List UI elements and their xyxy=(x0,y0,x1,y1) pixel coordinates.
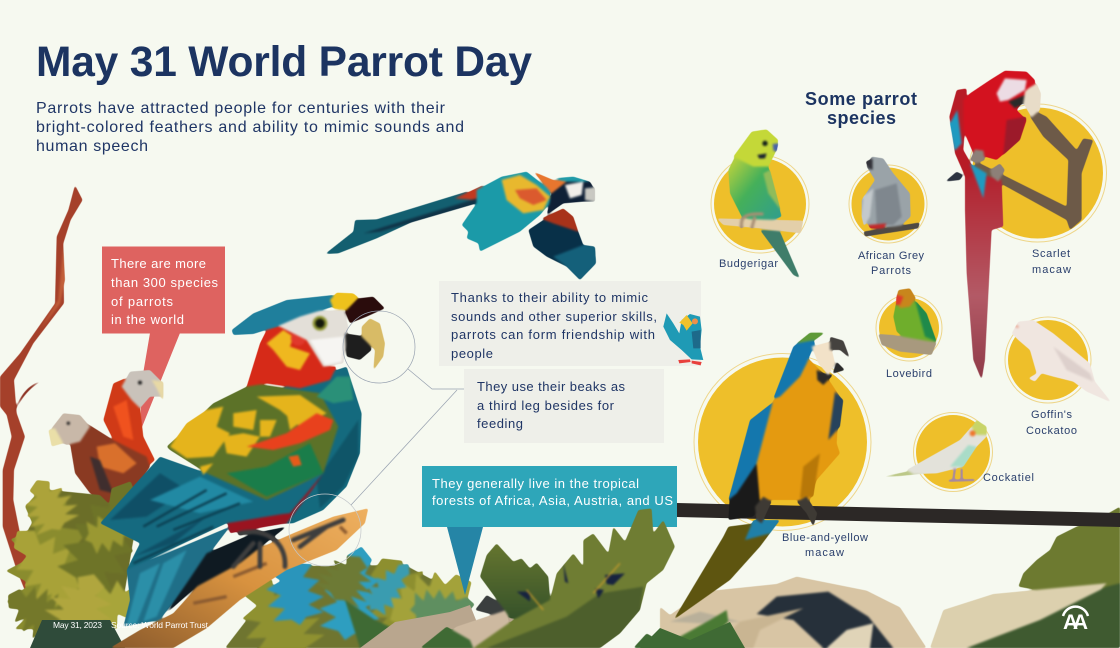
heading: some parrot species xyxy=(805,89,917,128)
wing xyxy=(728,463,760,520)
upper beak xyxy=(362,318,385,371)
body xyxy=(963,71,1035,160)
intro text: bright-colored feathers and ability to mimic sounds and xyxy=(36,119,464,136)
callout: species count: of parrots xyxy=(111,294,174,309)
callout: species count tail xyxy=(140,333,180,432)
species: goffin's cockatoo: Goffin's xyxy=(1031,409,1072,421)
beige bottom centre xyxy=(360,605,515,648)
callout: mimic friendship: people xyxy=(451,346,493,361)
face xyxy=(997,78,1027,102)
parrot: red back xyxy=(103,370,163,473)
icon: cartoon parrot xyxy=(663,313,703,365)
species: blue-and-yellow macaw: Blue-and-yellow xyxy=(782,532,868,544)
parrot: brown back xyxy=(48,413,150,510)
heading: some parrot species: species xyxy=(827,108,896,128)
left foliage xyxy=(0,467,162,648)
lower wing xyxy=(100,457,323,570)
white face xyxy=(277,310,348,367)
species: budgerigar xyxy=(711,129,809,278)
callout: species count: than 300 species xyxy=(111,275,218,290)
bottom centre foliage xyxy=(220,536,485,648)
eye xyxy=(313,316,327,331)
species: lovebird xyxy=(876,288,942,380)
feet xyxy=(755,497,817,527)
intro text: human speech xyxy=(36,138,148,155)
species: african grey xyxy=(849,157,927,277)
branch xyxy=(110,508,368,648)
flying parrot xyxy=(325,172,596,280)
footer: date and source: Source: World Parrot Trust xyxy=(111,620,209,630)
tail xyxy=(965,170,1003,380)
bottom left dark ground xyxy=(30,620,125,648)
species: blue-and-yellow macaw: macaw xyxy=(805,547,844,559)
upper wing xyxy=(167,383,338,500)
species: goffin's cockatoo: Cockatoo xyxy=(1026,425,1077,437)
red neck xyxy=(247,327,337,388)
dark tail tip xyxy=(945,172,963,182)
callout: habitat: They generally live in the tropical xyxy=(432,476,639,491)
green foliage at bottom right of centre xyxy=(640,622,745,648)
dark crest xyxy=(345,297,385,323)
callout: mimic friendship: parrots can form friendship with xyxy=(451,327,655,342)
intro text xyxy=(36,100,464,155)
neck scales xyxy=(317,377,353,403)
big green leaves xyxy=(420,508,720,648)
callout: species count: There are more xyxy=(111,256,206,271)
species: goffin's cockatoo xyxy=(1005,317,1112,437)
species: lovebird: Lovebird xyxy=(886,368,932,380)
callout: beak use: feeding xyxy=(477,416,523,431)
species: blue-and-yellow macaw xyxy=(673,333,1120,620)
crest xyxy=(232,295,333,335)
callout: mimic friendship: sounds and other superior skills, xyxy=(451,309,657,324)
left wing xyxy=(949,88,977,180)
species: scarlet macaw xyxy=(945,71,1106,380)
body xyxy=(200,367,362,527)
footer: date and source: May 31, 2023 xyxy=(53,620,102,630)
tree branch on left xyxy=(0,185,83,628)
species: budgerigar: Budgerigar xyxy=(719,258,778,270)
intro text: Parrots have attracted people for centuries with their xyxy=(36,100,446,117)
beige and dark feathers bottom xyxy=(660,507,1120,648)
callout: habitat xyxy=(422,466,677,595)
callout: species count xyxy=(102,246,225,334)
perch xyxy=(677,503,1120,527)
species: cockatiel xyxy=(878,412,1034,492)
main parrot xyxy=(100,293,385,648)
species: african grey: African Grey xyxy=(858,250,924,262)
head xyxy=(773,333,815,398)
species: scarlet macaw: Scarlet xyxy=(1032,248,1070,260)
callout: species count: in the world xyxy=(111,312,184,327)
species: african grey: Parrots xyxy=(871,265,912,277)
logo: AA: AA xyxy=(1063,611,1088,634)
yellow crest xyxy=(330,293,358,310)
callout: beak use xyxy=(464,369,664,443)
callout: habitat: forests of Africa, Asia, Austria, and US xyxy=(432,493,673,508)
species: cockatiel: Cockatiel xyxy=(983,472,1034,484)
footer: date and source xyxy=(53,620,209,630)
heading: some parrot species: Some parrot xyxy=(805,89,917,109)
body xyxy=(757,353,840,500)
lower beak xyxy=(345,333,372,360)
callout: beak use: They use their beaks as xyxy=(477,379,626,394)
dark under belly xyxy=(167,527,287,613)
tail xyxy=(123,527,230,627)
callout: beak use: a third leg besides for xyxy=(477,398,615,413)
branch xyxy=(973,110,1093,230)
tail xyxy=(673,520,780,620)
claws xyxy=(970,149,1005,182)
callout: mimic friendship: Thanks to their ability to mimic xyxy=(451,290,648,305)
title: May 31 World Parrot Day xyxy=(36,39,532,86)
two small background parrots xyxy=(48,370,163,510)
annotation circles and lines xyxy=(289,311,464,566)
yellow cheek xyxy=(267,330,310,370)
callout: mimic friendship xyxy=(439,281,701,366)
species: scarlet macaw: macaw xyxy=(1032,264,1071,276)
claws xyxy=(233,520,343,567)
